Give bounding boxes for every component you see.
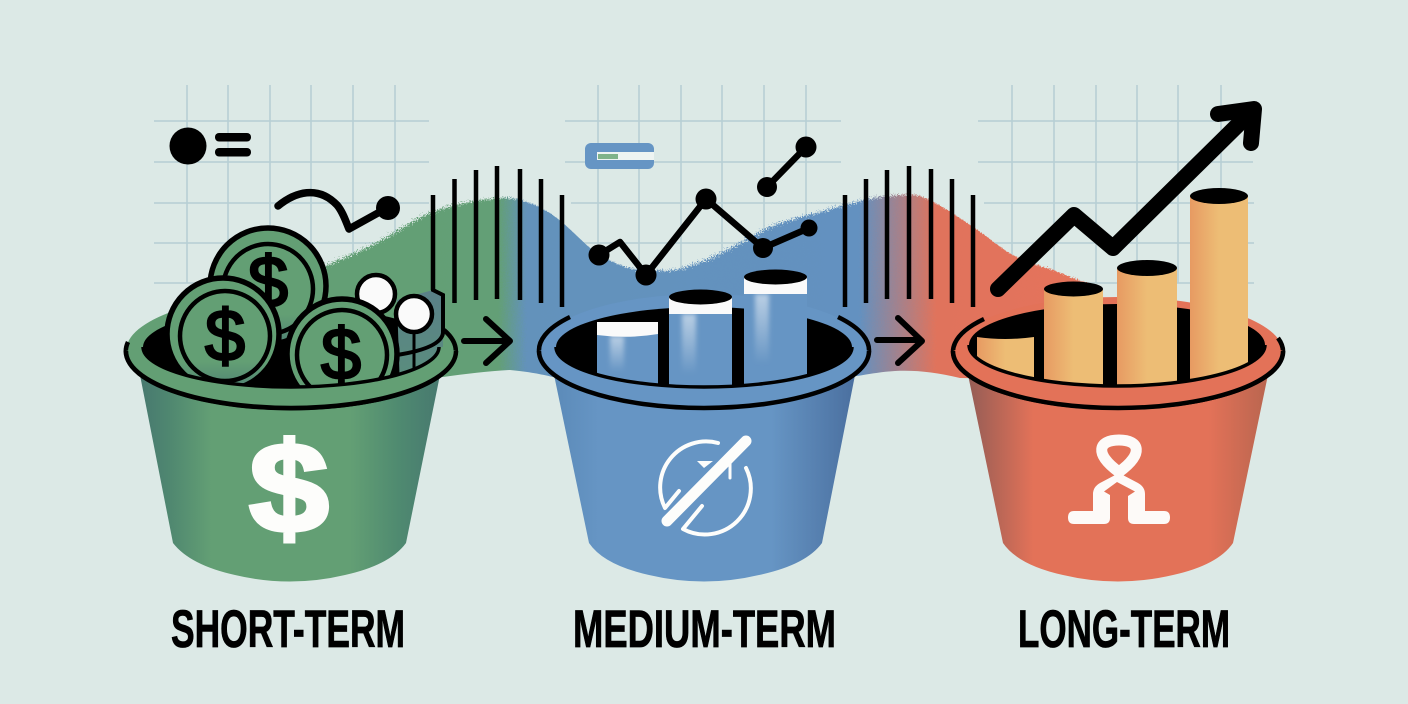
arrow: short to medium	[464, 319, 510, 363]
bar 4	[1190, 188, 1248, 394]
opening front edge	[969, 345, 1265, 386]
rim outline	[539, 317, 869, 407]
bucket: medium-term	[539, 270, 869, 582]
bar 2	[1044, 282, 1103, 394]
bar 3	[1117, 260, 1177, 394]
small line chart	[278, 193, 400, 229]
rim front	[539, 347, 869, 408]
coin right: $	[321, 315, 361, 395]
bucket body	[553, 370, 856, 582]
rim front	[953, 345, 1283, 408]
white coins and holder	[354, 272, 445, 372]
rim front outline	[126, 351, 456, 408]
medium legend pill	[585, 143, 654, 169]
icon: slashed clock	[660, 441, 751, 535]
arrow: medium to long	[877, 318, 922, 363]
cylinder 1	[597, 322, 658, 384]
cylinder 3	[744, 270, 807, 392]
bucket: short-term	[126, 193, 456, 582]
rim front outline	[539, 351, 869, 408]
rim front	[126, 347, 456, 408]
bars	[977, 188, 1248, 395]
cylinders	[597, 270, 807, 392]
opening front edge	[143, 347, 439, 387]
label: short-term: SHORT-TERM	[171, 600, 405, 659]
connector lines: short to medium	[433, 166, 562, 307]
coin left: $	[205, 296, 245, 376]
rim front outline	[953, 351, 1283, 408]
opening front edge	[556, 347, 852, 387]
flowing colour band	[324, 192, 1088, 378]
connector lines: medium to long	[845, 166, 973, 307]
coin back: $	[248, 243, 288, 323]
bucket contents	[164, 225, 445, 386]
dollar icon: $	[249, 416, 329, 559]
bucket: long-term	[953, 188, 1283, 582]
bucket body	[967, 370, 1269, 582]
bucket opening	[556, 307, 852, 387]
bucket opening	[969, 304, 1265, 386]
bucket rim	[126, 294, 456, 408]
rim outline	[953, 319, 1283, 408]
bucket opening	[143, 307, 439, 387]
background grids	[154, 85, 1254, 283]
rising trend arrow	[998, 109, 1254, 289]
bucket rim	[953, 297, 1283, 407]
bucket body	[139, 370, 441, 582]
bar 1	[977, 337, 1034, 378]
medium line chart	[588, 136, 818, 286]
coin left	[167, 278, 279, 390]
rim outline	[126, 330, 456, 408]
coin back	[210, 228, 326, 344]
label: long-term: LONG-TERM	[1018, 600, 1230, 659]
cylinder 2	[669, 290, 732, 392]
bucket rim	[539, 294, 869, 408]
legend: circle and bars	[170, 128, 251, 164]
infographic canvas	[124, 85, 1286, 648]
coin right	[286, 296, 400, 386]
icon: person	[1068, 440, 1170, 524]
label: medium-term: MEDIUM-TERM	[573, 600, 836, 659]
